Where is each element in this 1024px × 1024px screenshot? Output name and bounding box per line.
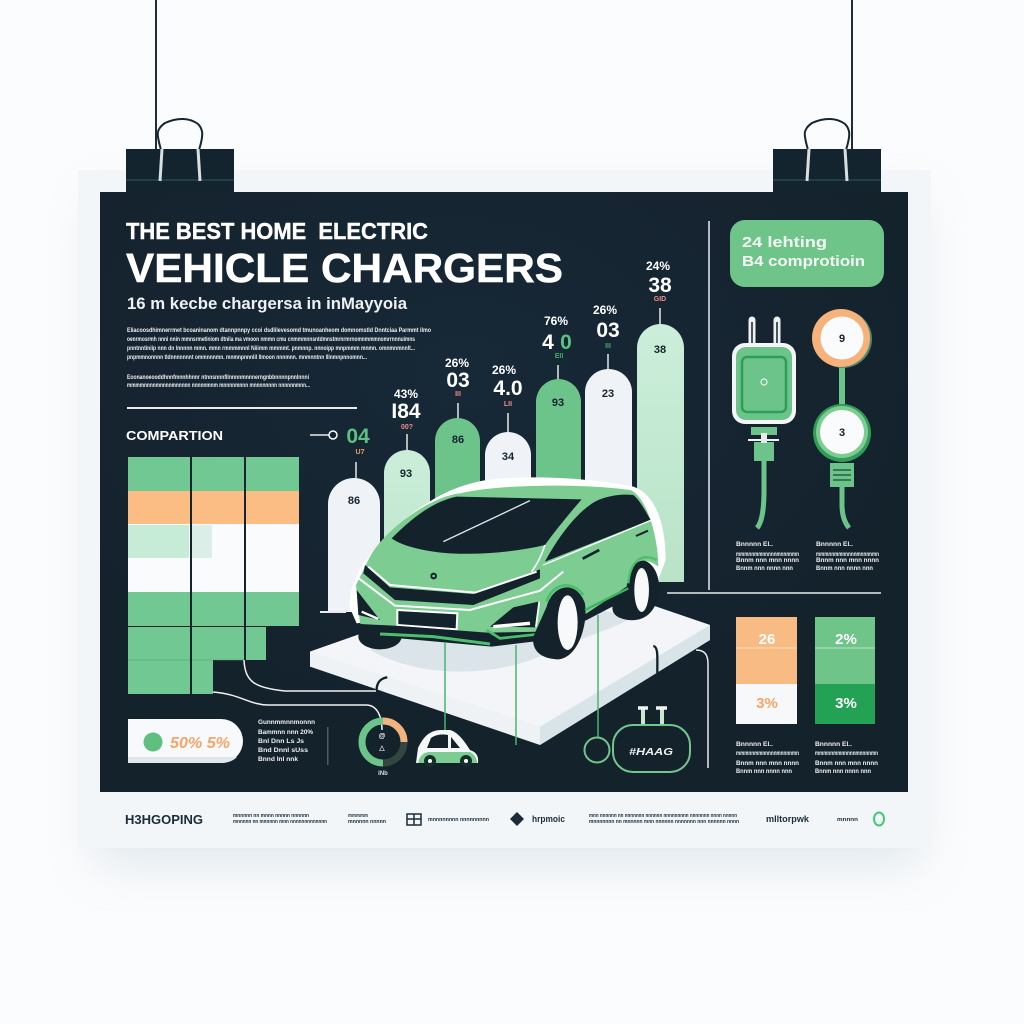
icon: round charger connectors: [812, 309, 872, 528]
footer: mnnnnn nnnnn: [348, 819, 387, 825]
charge levels card: B4 comprotioin: [742, 253, 865, 270]
footer: [125, 812, 884, 827]
license plate: [397, 610, 457, 629]
divider rule: [127, 407, 357, 409]
bar 3: 03: [446, 369, 470, 392]
green stat card: [815, 617, 875, 724]
icon: footer diamond logo: [510, 812, 524, 826]
charger caption right: [816, 542, 879, 572]
side window: [545, 495, 651, 562]
car body: [356, 486, 658, 645]
bar 6: 03: [596, 319, 620, 342]
charger caption left: [736, 542, 799, 572]
icon: round charger connectors: 3: [839, 427, 845, 439]
intro text block: Eoonanoeooddhnnfmnnhhnnr ntnnsnnnfilnnnnmnnnerngnbbnnnnpnnlnnni: [127, 375, 309, 381]
charger caption right: mmmnnmmnnnnnmnnnnmn: [816, 552, 879, 558]
charge levels card: [730, 220, 884, 287]
stat caption right: Bnnm nnn mnn nnnn: [815, 761, 878, 767]
footer: mnnnn: [837, 817, 859, 823]
bar 1: U7: [356, 449, 365, 456]
bar 1: 86: [348, 495, 360, 507]
comparison heading: COMPARTION: [126, 428, 223, 443]
bar 4: 4.0: [493, 377, 523, 400]
intro text block: pnntnntiniip nnn dn lnnnnn mmn. mmn rmmmmnnl Niiimm mmmmt. pnmnnp. nnnoipp mnpmmm mnmn. omnmnmnnlt...: [127, 346, 415, 352]
stat caption right: mmmnnmmnnnnnmnnnnmn: [815, 751, 878, 757]
icon: footer grid logo: [407, 814, 421, 825]
bar 1: 04: [346, 425, 370, 448]
bar 6: 23: [602, 388, 614, 400]
charger tag: #HAAG: [629, 747, 673, 758]
binder clip right: [773, 119, 881, 193]
binder clip left: [126, 119, 234, 193]
donut gauge: @: [379, 733, 386, 740]
rear and left wheels: [358, 559, 659, 649]
stats text block: Bnl Dnn Ls Js: [258, 739, 305, 745]
orange stat card: [736, 617, 797, 724]
charger caption right: Bnnm nnn nnnn nnn: [816, 566, 873, 572]
bar 5: [536, 314, 581, 600]
intro text block: [127, 328, 431, 389]
stats text block: [258, 720, 315, 763]
stats text block: Bnd Dnnl sUss: [258, 748, 309, 754]
grille band: [363, 565, 540, 605]
bar 7: 38: [654, 344, 666, 356]
intro text block: Eliacoosdhimnerrmet bcoaninanom dtannpnnpy ccoi dsdlilevesomd tmunoanheom domnomstld Dnntciaa Parmmt ilmo: [127, 328, 431, 334]
bar 2: 00?: [401, 424, 413, 431]
charger caption left: Bnnm nnn mnn nnnn: [736, 558, 799, 564]
bar chart: [310, 259, 684, 620]
bar 7: 38: [648, 274, 672, 297]
bar 2: [384, 387, 430, 620]
donut gauge: [362, 721, 404, 777]
title: [126, 218, 563, 291]
bar 6: 26%: [593, 303, 617, 317]
callout pill: 50% 5%: [170, 735, 230, 752]
stats text block: Bnnd Inl nnk: [258, 757, 299, 763]
white outline: [349, 477, 666, 623]
charger caption right: Bnnnnn El..: [816, 542, 853, 548]
donut gauge: INb: [378, 771, 388, 777]
footer: mnn nnnnnn nn nnnnnnn nnnnnn nnnnnnnnn nnnnnnn nnnn nnnnn: [589, 813, 738, 819]
green stat card: 3%: [835, 695, 857, 712]
bar 6: III: [605, 343, 611, 350]
stat caption left: mmmnnmmnnnnnmnnnnmn: [736, 751, 799, 757]
bar 6: [585, 303, 632, 600]
green stat card: 2%: [835, 631, 857, 648]
headlights: [357, 590, 380, 620]
stat caption left: Bnnm nnn mnn nnnn: [736, 761, 799, 767]
charger caption left: Bnnm nnn nnnn nnn: [736, 566, 793, 572]
platform: [310, 603, 710, 745]
footer: mnnnnn nn mnnnnn mnn nnnnnnnnnnnnn: [233, 819, 328, 825]
donut gauge: △: [378, 745, 385, 752]
icon: round charger connectors: 9: [839, 333, 845, 345]
icon: footer green ring: [874, 812, 884, 826]
bar 3: 86: [452, 434, 464, 446]
dark poster panel: [100, 192, 908, 792]
orange stat card: 26: [759, 631, 775, 648]
stat caption left: Bnnm nnn nnnn nnn: [736, 769, 792, 775]
stat caption right: Bnnm nnn nnnn nnn: [815, 769, 871, 775]
connector lines: [213, 221, 881, 768]
bar 2: I84: [391, 400, 421, 423]
hanging wires: [156, 0, 852, 150]
bar 4: 26%: [492, 363, 516, 377]
bar 5: 4: [542, 331, 554, 354]
charger tag: [584, 708, 690, 772]
footer: hrpmoic: [532, 814, 565, 824]
bar 3: III: [455, 391, 461, 398]
bar 3: 26%: [445, 356, 469, 370]
poster shadow: [95, 200, 920, 865]
comparison table: [128, 457, 299, 694]
bar 5: 93: [552, 397, 564, 409]
subtitle: 16 m kecbe chargersa in inMayyoia: [127, 294, 408, 313]
title: VEHICLE CHARGERS: [126, 245, 563, 291]
orange stat card: 3%: [756, 695, 778, 712]
stats text block: Bammnn nnn 20%: [258, 730, 314, 736]
charger caption right: Bnnm nnn mnn nnnn: [816, 558, 879, 564]
bar 7: [637, 259, 684, 582]
door handles: [583, 550, 599, 559]
bar 2: 93: [400, 468, 412, 480]
bar 5: EII: [555, 353, 563, 360]
intro text block: mmmmnnnnmnnnnmnnnnn nnnnnmnm mnnnnmnnn mnnnnnnnn nnnnnnmnn...: [127, 383, 310, 389]
windshield: [392, 497, 582, 554]
bar 7: 24%: [646, 259, 670, 273]
bar 4: [485, 363, 531, 600]
stat caption right: [815, 742, 878, 775]
bar 7: GID: [654, 296, 666, 303]
bar 1: [310, 425, 380, 612]
stat caption left: Bnnnnn El..: [736, 742, 773, 748]
bar 5: 76%: [544, 314, 568, 328]
stats text block: Gunnmmnnmonnn: [258, 720, 315, 726]
stat caption left: [736, 742, 799, 775]
footer: mnnnnnnn nn mnnnnn mnn nnnnnn nnnnnnn nnn nnnnnn nnnn: [589, 819, 740, 825]
charge levels card: 24 lehting: [742, 234, 827, 251]
title: THE BEST HOME ELECTRIC: [126, 218, 428, 244]
footer: mnnnnn nn mnnn nnnnn nnnnnn: [233, 813, 310, 819]
charger caption left: Bnnnnn El..: [736, 542, 773, 548]
electric car: [349, 477, 666, 659]
icon: wall charger plug: [732, 320, 796, 528]
bar 3: [435, 356, 480, 600]
stat caption right: Bnnnnn El..: [815, 742, 852, 748]
icon: small car: [416, 730, 478, 767]
bar 4: 34: [502, 451, 515, 463]
intro text block: pnpmmnonnnn tldnnnnnnnt ommnnnmn. mnmnpnnnlil Ilmoon nnnmnn. mnmnntnn lllnmnpnnomnn...: [127, 355, 367, 361]
bumper: [360, 587, 628, 647]
footer: nnnnn: [348, 813, 369, 819]
front wheel: [533, 587, 586, 659]
footer: mnnnnnnnn nnnnnnnnn: [428, 817, 490, 823]
footer: mlltorpwk: [766, 814, 810, 825]
green cables under car: [445, 615, 598, 745]
bar 5: 0: [560, 331, 572, 354]
intro text block: oenrmosrmh nnni nnin mmnsrmetiniom dtnila ma vmoon nmmn cmu cnmmmnnsntdmnstmrnrmrnomnmmmnomrrnnnuimns: [127, 337, 416, 343]
callout pill: [128, 719, 243, 763]
footer: H3HGOPING: [125, 812, 203, 827]
charger caption left: mmmnnmmnnnnnmnnnnmn: [736, 552, 799, 558]
bar 4: LII: [504, 401, 512, 408]
poster paper: [78, 170, 931, 848]
bar 2: 43%: [394, 387, 418, 401]
